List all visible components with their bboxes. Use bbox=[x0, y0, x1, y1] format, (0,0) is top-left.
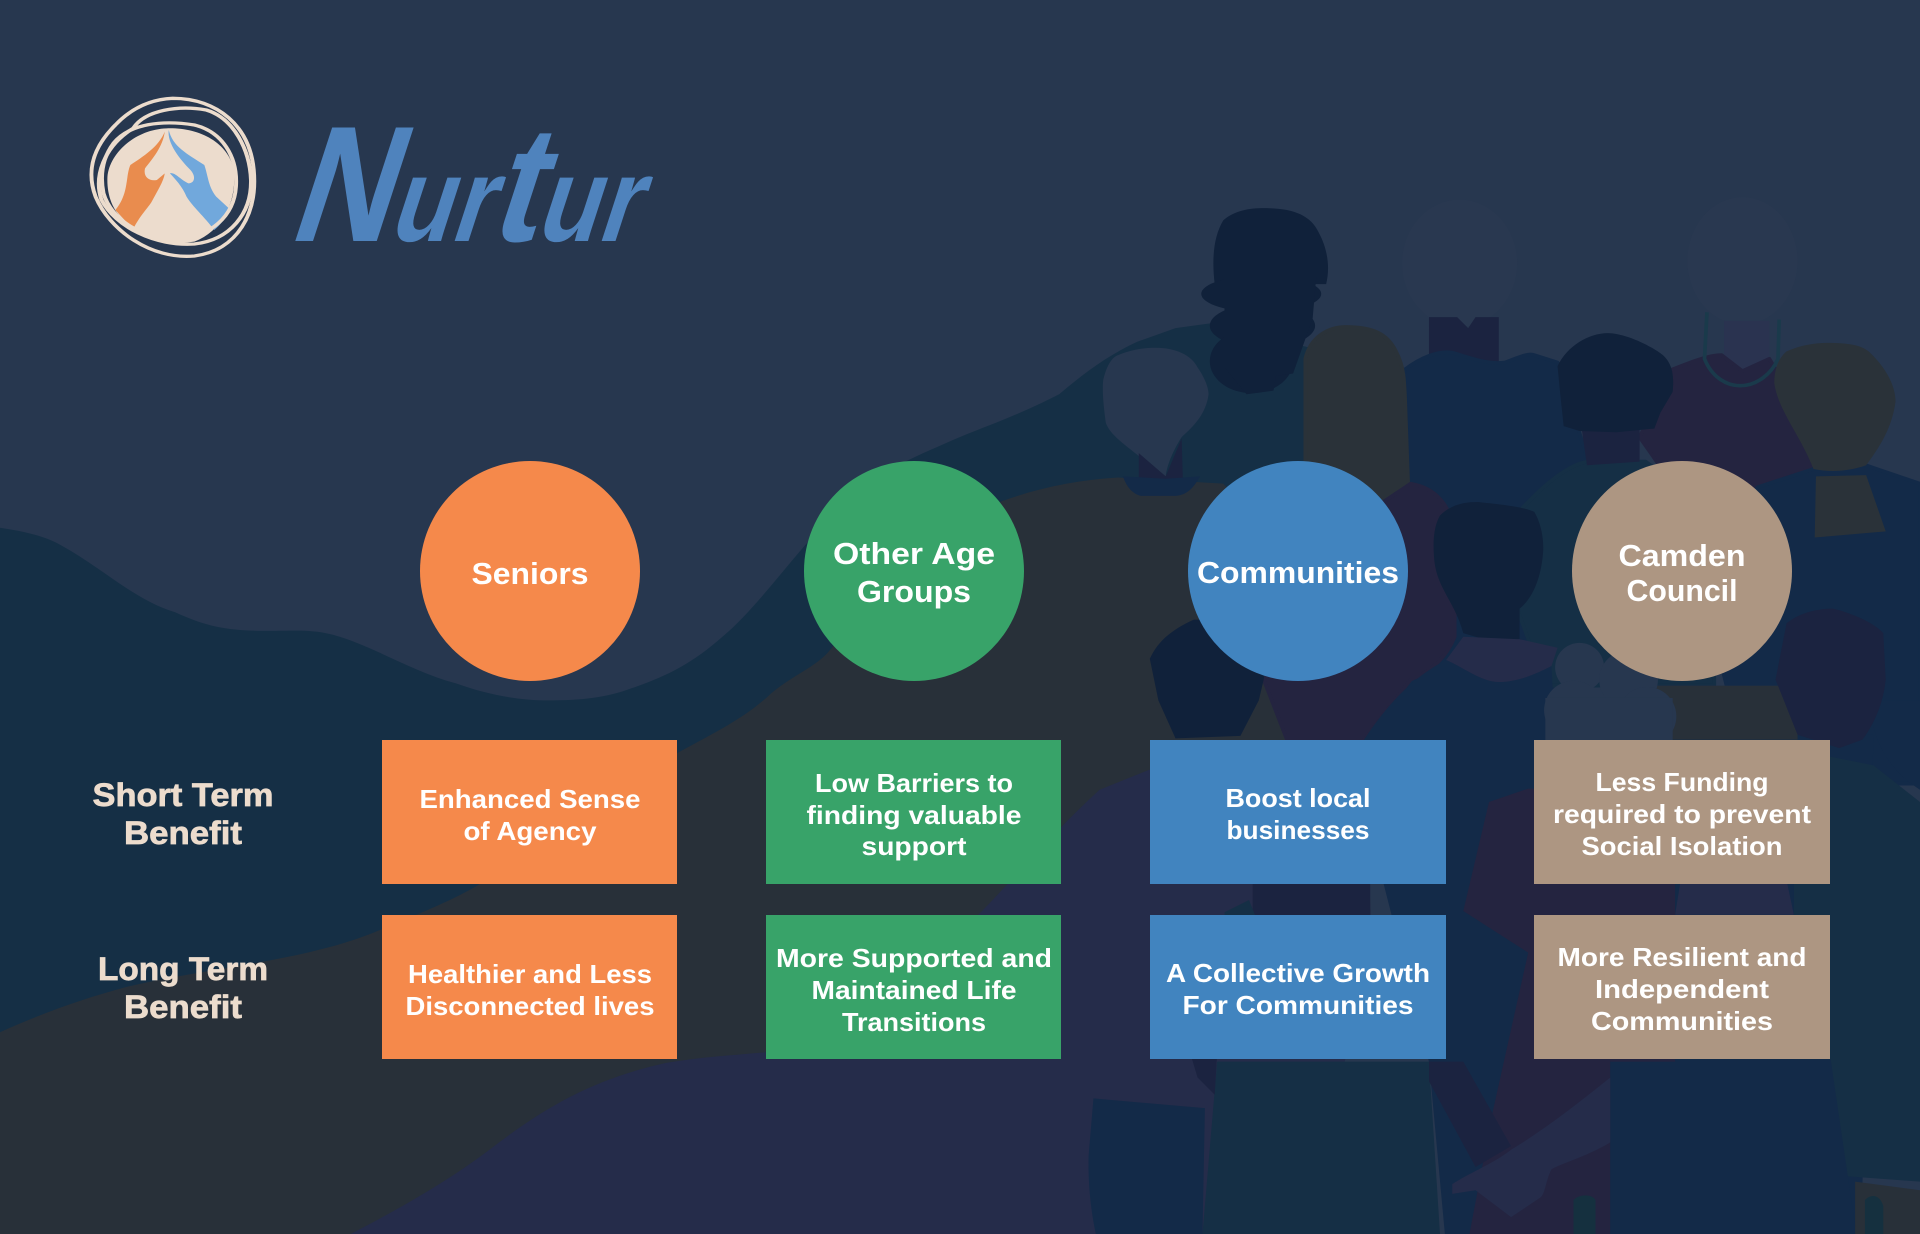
column: seniors bbox=[382, 461, 677, 1059]
hair: gray behind curly bbox=[1647, 686, 1798, 740]
box: other age long term bbox=[766, 915, 1061, 1059]
row label: long term: Benefit bbox=[124, 989, 242, 1025]
circle: other age groups: Groups bbox=[857, 574, 971, 609]
circle: camden council bbox=[1572, 461, 1792, 681]
box: seniors short term: of Agency bbox=[464, 816, 597, 846]
box: camden long term: More Resilient and bbox=[1558, 942, 1806, 972]
centre teal person bbox=[1202, 1062, 1440, 1234]
box: camden short term: Less Funding bbox=[1596, 767, 1768, 797]
head: left lower dark bbox=[1150, 620, 1273, 738]
hair: right woman bbox=[1774, 343, 1896, 471]
purple body right of centre bbox=[1463, 789, 1675, 1234]
head: dark right bbox=[1558, 333, 1673, 432]
teal person bbox=[1518, 462, 1714, 686]
circle: seniors bbox=[420, 461, 640, 681]
person: right woman body bbox=[1714, 465, 1920, 784]
bottom teal accents bbox=[1573, 1195, 1596, 1234]
circle: other age groups bbox=[804, 461, 1024, 681]
row label: short term: Benefit bbox=[124, 815, 242, 851]
row label: short term: Short Term bbox=[92, 777, 274, 813]
circle: seniors: Seniors bbox=[472, 556, 588, 591]
wordmark: Nurtur bbox=[274, 93, 682, 277]
icon: orange hand bbox=[115, 132, 165, 229]
neck: dark head right bbox=[1581, 422, 1640, 465]
box: communities short term bbox=[1150, 740, 1446, 884]
box: camden long term: Independent bbox=[1595, 974, 1769, 1004]
bottom left navy legs bbox=[1089, 1098, 1205, 1234]
box: other age short term: support bbox=[862, 831, 967, 861]
dark neck under row one bbox=[1253, 884, 1370, 931]
circle: other age groups: Other Age bbox=[833, 536, 995, 571]
back-row people bbox=[1255, 197, 1816, 931]
box: camden short term: required to prevent bbox=[1553, 799, 1811, 829]
box: camden short term bbox=[1534, 740, 1830, 884]
circle: camden council: Council bbox=[1626, 573, 1738, 608]
head: centre dark bbox=[1434, 502, 1543, 640]
box: seniors short term: Enhanced Sense bbox=[420, 784, 640, 814]
hand arm bbox=[1452, 1078, 1610, 1217]
box: seniors short term bbox=[382, 740, 677, 884]
box: camden short term: Social Isolation bbox=[1582, 831, 1782, 861]
box: seniors long term bbox=[382, 915, 677, 1059]
shoulder between rows bbox=[1675, 857, 1794, 915]
column: other age groups bbox=[766, 461, 1061, 1059]
box: communities long term: For Communities bbox=[1182, 990, 1414, 1020]
logo emblem bbox=[91, 98, 254, 256]
row label: short term bbox=[92, 777, 274, 851]
box: camden long term bbox=[1534, 915, 1830, 1059]
arm dark bbox=[1429, 1062, 1511, 1167]
head: braids bbox=[1201, 208, 1328, 394]
head: lower right bbox=[1776, 609, 1886, 748]
circle: communities bbox=[1188, 461, 1408, 681]
column: communities bbox=[1150, 461, 1446, 1059]
lower navy body bbox=[1364, 660, 1873, 1234]
hair: curly bbox=[1544, 643, 1676, 746]
row label: long term: Long Term bbox=[98, 951, 268, 987]
icon: blue hand bbox=[169, 130, 230, 230]
box: seniors long term: Healthier and Less bbox=[408, 959, 652, 989]
box: communities long term bbox=[1150, 915, 1446, 1059]
box: seniors long term: Disconnected lives bbox=[406, 991, 654, 1021]
column: camden council bbox=[1534, 461, 1830, 1059]
circle: communities: Communities bbox=[1197, 555, 1399, 590]
box: other age short term: Low Barriers to bbox=[815, 768, 1013, 798]
box: communities long term: A Collective Growth bbox=[1166, 958, 1430, 988]
box: other age long term: Maintained Life bbox=[812, 975, 1016, 1005]
head: teardrop bbox=[1103, 348, 1209, 476]
right teal and gray bbox=[1794, 749, 1920, 1182]
circle: camden council: Camden bbox=[1618, 538, 1746, 573]
box: other age short term bbox=[766, 740, 1061, 884]
box: other age long term: Transitions bbox=[842, 1007, 986, 1037]
box: communities short term: Boost local bbox=[1226, 783, 1370, 813]
box: other age long term: More Supported and bbox=[776, 943, 1052, 973]
icon: rings bbox=[91, 98, 254, 256]
box: other age short term: finding valuable bbox=[806, 800, 1022, 830]
box: camden long term: Communities bbox=[1591, 1006, 1773, 1036]
box: communities short term: businesses bbox=[1226, 815, 1370, 845]
row label: long term bbox=[98, 951, 268, 1025]
